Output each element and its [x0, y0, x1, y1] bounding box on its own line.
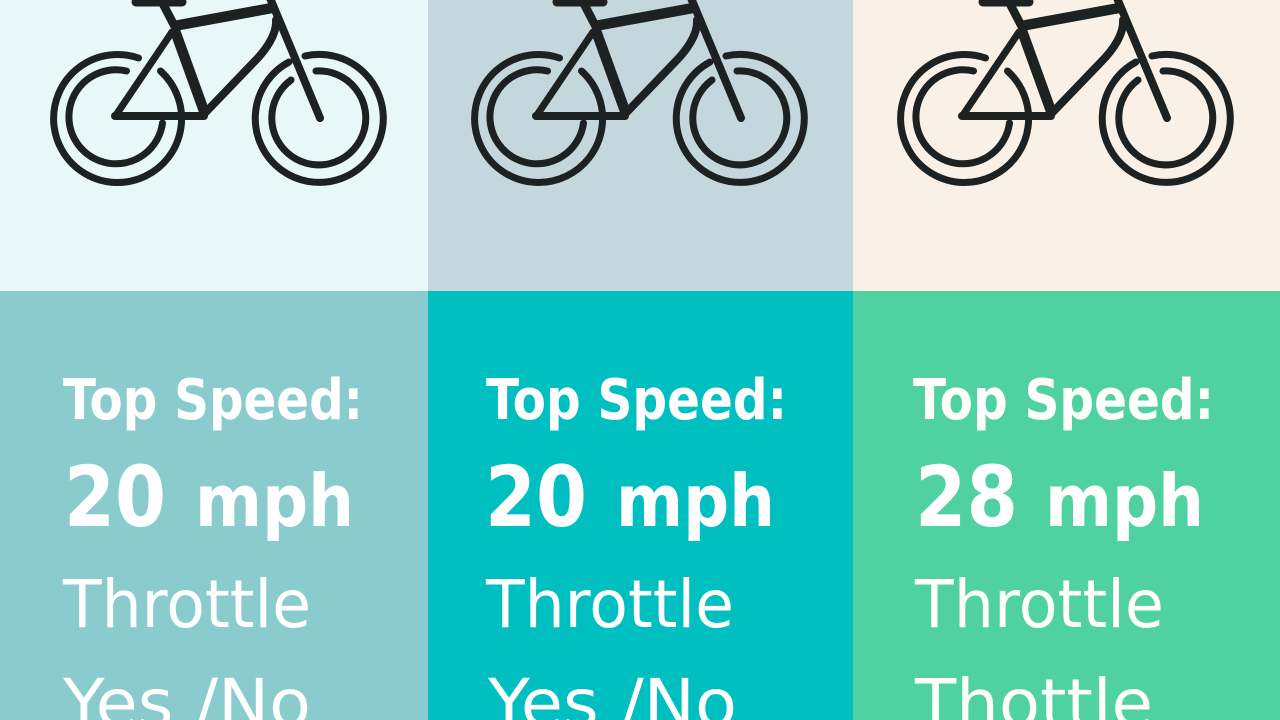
throttle label: Throttle: [62, 566, 311, 643]
panel: left specs: [0, 291, 428, 720]
speed value: 20: [485, 448, 587, 546]
panel: middle specs: [428, 291, 853, 720]
icon: right bicycle: [901, 0, 1230, 182]
throttle label: Throttle: [485, 566, 734, 643]
panel: right specs: [853, 291, 1280, 720]
panel: left bike background: [0, 0, 428, 291]
heading: top speed: Top Speed:: [63, 368, 363, 433]
panel: middle bike background: [428, 0, 853, 291]
heading: top speed: Top Speed:: [913, 368, 1214, 433]
speed unit: mph: [195, 459, 354, 543]
heading: top speed: Top Speed:: [486, 368, 787, 433]
icon: middle bicycle: [475, 0, 804, 182]
panel: right bike background: [853, 0, 1280, 291]
speed unit: mph: [1045, 459, 1204, 543]
icon: left bicycle: [54, 0, 383, 182]
throttle label: Throttle: [914, 566, 1164, 643]
speed unit: mph: [616, 459, 775, 543]
speed value: 28: [915, 448, 1018, 546]
speed value: 20: [64, 448, 166, 546]
